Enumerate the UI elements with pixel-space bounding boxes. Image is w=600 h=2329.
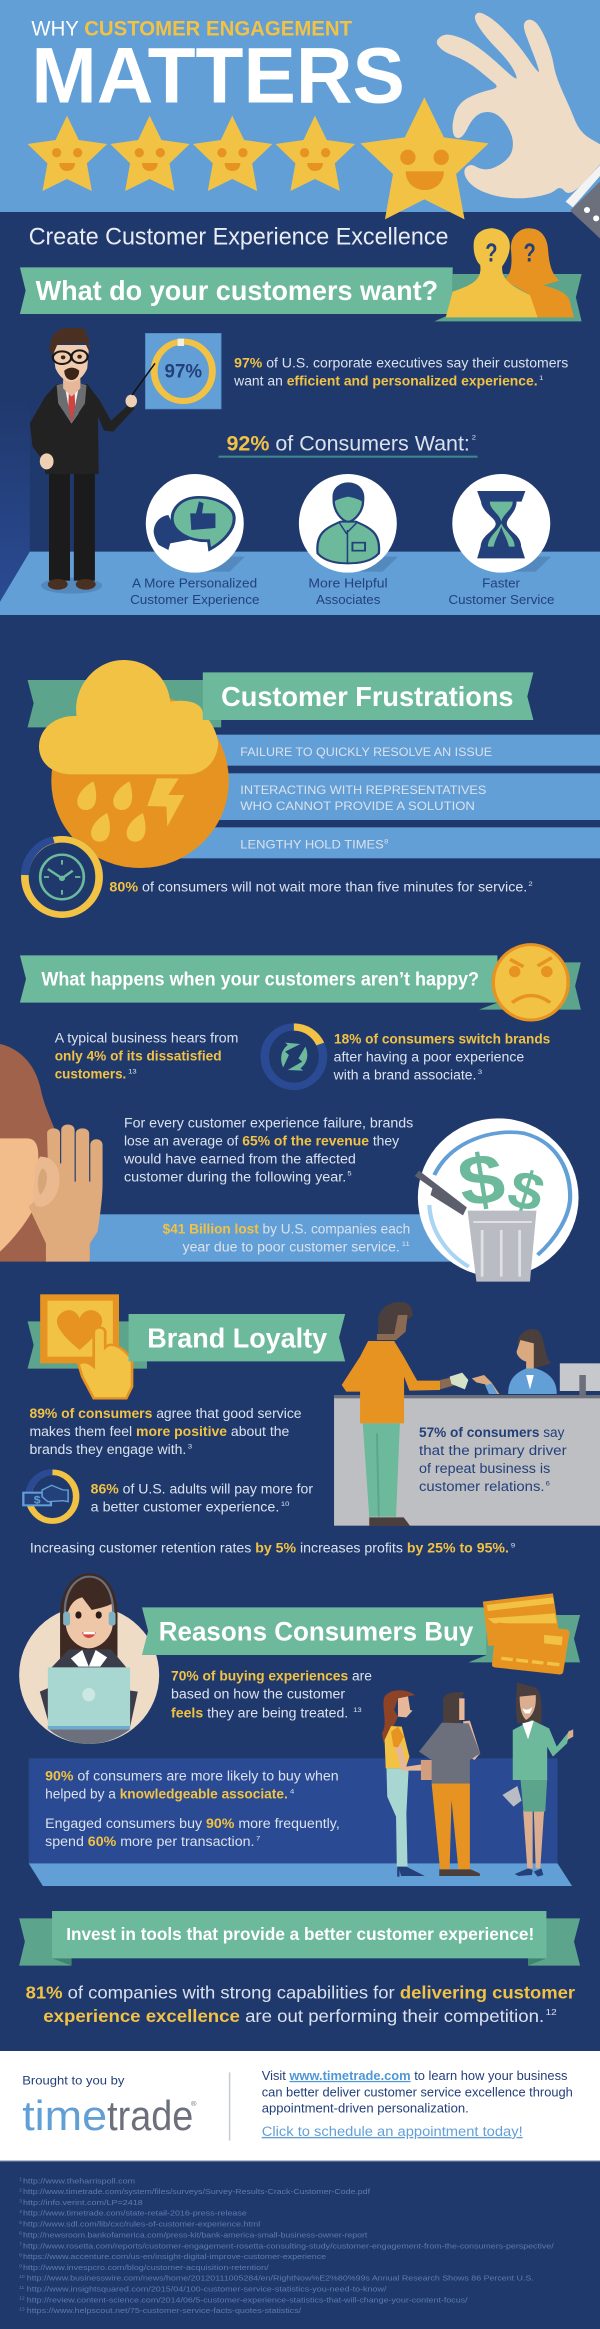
icon: five stars bbox=[28, 97, 489, 219]
bar: $41 billion: 11 bbox=[402, 1240, 410, 1248]
text: 18% switch brands: 3 bbox=[478, 1068, 482, 1076]
heading: 92% of consumers want: 2 bbox=[472, 434, 476, 441]
text: 81% of companies bbox=[26, 1983, 576, 2027]
panel: references bbox=[0, 2160, 600, 2315]
ribbon: customer frustrations heading: Customer Frustrations bbox=[221, 682, 514, 713]
heading: What do your customers want? bbox=[36, 276, 438, 306]
labels: consumer wants: Customer Service bbox=[448, 592, 555, 607]
panel: references: 12 bbox=[19, 2296, 25, 2301]
text: 86% of US adults bbox=[91, 1481, 313, 1515]
text: 57% of consumers: of repeat business is bbox=[419, 1461, 550, 1477]
ribbon back bbox=[28, 1321, 147, 1369]
chart: 86% ring with money bbox=[22, 1472, 76, 1521]
icon: money in trash: $ bbox=[453, 1138, 510, 1222]
labels: consumer wants: A More Personalized bbox=[132, 576, 257, 590]
figure: woman listening bbox=[0, 1044, 103, 1262]
figure: woman customer bbox=[382, 1690, 431, 1877]
ribbon: reasons consumers buy: Reasons Consumers Buy bbox=[159, 1617, 473, 1647]
text: 65% of the revenue: lose an average of 65% of the revenue they bbox=[124, 1133, 400, 1149]
logo: timetrade: time bbox=[22, 2094, 107, 2139]
text: 65% of the revenue: 5 bbox=[347, 1170, 352, 1178]
icon: credit cards bbox=[483, 1593, 570, 1674]
text: retention rates: 9 bbox=[511, 1542, 515, 1549]
text: 81% of companies: 81% of companies with strong capabilities for delivering customer bbox=[26, 1983, 576, 2003]
labels: consumer wants: Customer Experience bbox=[130, 592, 260, 607]
panel: references: 7 bbox=[19, 2242, 22, 2247]
ribbon: brand loyalty heading: Brand Loyalty bbox=[147, 1323, 327, 1354]
panel: footer sponsor bbox=[0, 2051, 600, 2161]
text: 81% of companies: experience excellence are out performing their competition. bbox=[43, 2006, 544, 2027]
text: frustration list: 8 bbox=[384, 838, 388, 845]
panel: references: http://www.invespcro.com/blog/customer-acquisition-retention/ bbox=[23, 2263, 270, 2272]
text: 90% of consumers bbox=[45, 1769, 340, 1850]
panel: references: http://www.timetrade.com/system/files/surveys/Survey-Results-Crack-Customer-Code.pdf bbox=[23, 2187, 371, 2196]
figure: man presenting bbox=[30, 327, 137, 594]
text: 70% of buying experiences: 70% of buying experiences are bbox=[171, 1669, 372, 1684]
panel: customer frustrations bbox=[21, 660, 600, 918]
panel: what customers want bbox=[0, 327, 600, 615]
icon: helpful associate circle bbox=[299, 474, 398, 573]
text: 65% of the revenue: would have earned from the affected bbox=[123, 1151, 356, 1167]
title: why customer engagement: WHY CUSTOMER ENGAGEMENT bbox=[31, 16, 352, 40]
text: 4% of dissatisfied: 13 bbox=[128, 1068, 137, 1075]
labels: consumer wants: Associates bbox=[316, 592, 380, 607]
text: 80% of consumers: 80% of consumers will not wait more than five minutes for service. bbox=[109, 880, 527, 895]
text: 97% executives bbox=[233, 356, 568, 389]
text: visit timetrade: Visit www.timetrade.com to learn how your business bbox=[262, 2069, 568, 2083]
icon: orange silhouette: ? bbox=[523, 238, 536, 267]
text: 18% switch brands: 18% of consumers switch brands bbox=[334, 1031, 550, 1047]
panel: references: 5 bbox=[19, 2220, 22, 2225]
text: 86% of US adults: 86% of U.S. adults will pay more for bbox=[91, 1481, 313, 1497]
ribbon back bbox=[28, 680, 221, 727]
text: frustration list: INTERACTING WITH REPRESENTATIVES bbox=[240, 783, 486, 797]
heading: 92% of consumers want: 92% of Consumers Want: bbox=[227, 431, 470, 455]
text: brought to you by: Brought to you by bbox=[22, 2074, 125, 2087]
text: 4% of dissatisfied: customers. bbox=[55, 1067, 126, 1082]
text: 18% switch brands: with a brand associate. bbox=[333, 1068, 476, 1083]
panel: associates stage bbox=[29, 1758, 572, 1886]
text: 57% of consumers: customer relations. bbox=[419, 1479, 545, 1495]
panel: references: 1 bbox=[19, 2177, 22, 2182]
text: 89% of consumers bbox=[29, 1406, 302, 1458]
text: 65% of the revenue: customer during the following year. bbox=[124, 1169, 346, 1185]
text: frustration list: WHO CANNOT PROVIDE A SOLUTION bbox=[240, 799, 475, 813]
icon: shirt cuff and sleeve bbox=[566, 165, 600, 238]
text: 65% of the revenue: For every customer experience failure, brands bbox=[124, 1115, 413, 1131]
chart: 97% ring: 97% bbox=[165, 361, 202, 382]
ribbon: invest in tools: Invest in tools that provide a better customer experience! bbox=[66, 1924, 534, 1944]
ribbon: invest in tools bbox=[19, 1911, 580, 1966]
panel: references: https://www.accenture.com/us-en/insight-digital-improve-customer-experience bbox=[23, 2252, 326, 2261]
text: 97% executives: want an efficient and personalized experience. bbox=[233, 374, 538, 389]
bar: $41 billion bbox=[90, 1214, 459, 1262]
labels: consumer wants bbox=[130, 576, 555, 607]
bars: frustrations bbox=[168, 735, 600, 858]
panel: references: 8 bbox=[19, 2253, 22, 2257]
icon: hourglass circle bbox=[452, 474, 551, 573]
icon: yellow silhouette: ? bbox=[485, 238, 497, 267]
panel: references: http://www.insightsquared.com/2015/04/100-customer-service-statistics-you-need-to-know/ bbox=[27, 2285, 388, 2294]
figure: customer bbox=[342, 1302, 468, 1526]
labels: consumer wants: Faster bbox=[482, 576, 520, 590]
panel: references: http://info.verint.com/LP=2418 bbox=[23, 2198, 143, 2207]
panel: references: 13 bbox=[19, 2307, 25, 2311]
text: 90% of consumers: Engaged consumers buy 90% more frequently, bbox=[45, 1816, 340, 1832]
icon: yellow silhouette bbox=[446, 228, 538, 317]
text: frustration list: LENGTHY HOLD TIMES bbox=[240, 838, 384, 851]
text: 89% of consumers: brands they engage with. bbox=[29, 1442, 186, 1458]
ribbon: unhappy heading bbox=[20, 955, 581, 1010]
chart: 86% ring with money: $ bbox=[34, 1495, 41, 1506]
bar: $41 billion: $41 Billion lost by U.S. companies each bbox=[163, 1221, 410, 1237]
text: 80% of consumers: 2 bbox=[528, 880, 533, 888]
chart: 97% ring bbox=[145, 333, 221, 409]
text: 90% of consumers: helped by a knowledgeable associate. bbox=[45, 1787, 288, 1802]
panel: header bbox=[0, 0, 600, 321]
text: 90% of consumers: spend 60% more per transaction. bbox=[45, 1834, 254, 1850]
text: 89% of consumers: 3 bbox=[188, 1443, 192, 1451]
text: 4% of dissatisfied: A typical business hears from bbox=[55, 1031, 238, 1046]
title: matters: MATTERS bbox=[31, 32, 405, 120]
panel: references: http://www.rosetta.com/reports/customer-engagement-rosetta-consulting-study/customer-engagement-from-the-consumers-perspective/ bbox=[23, 2242, 555, 2250]
text: 18% switch brands: after having a poor experience bbox=[334, 1050, 524, 1065]
panel: unhappy customers bbox=[0, 945, 581, 1282]
panel: invest in tools bbox=[0, 1911, 600, 2161]
icon: personalized experience circle bbox=[146, 474, 245, 573]
link: schedule an appointment: Click to schedule an appointment today! bbox=[262, 2124, 523, 2140]
logo: timetrade bbox=[22, 2094, 197, 2139]
ribbon: unhappy heading: What happens when your customers aren’t happy? bbox=[41, 969, 479, 990]
logo: timetrade: trade bbox=[107, 2094, 193, 2139]
icon: money in trash bbox=[415, 1118, 579, 1282]
text: 90% of consumers: 7 bbox=[256, 1835, 260, 1843]
figure: clerk behind counter bbox=[472, 1329, 600, 1395]
text: 70% of buying experiences: based on how the customer bbox=[171, 1687, 345, 1702]
chart: 18% ring with arrows bbox=[265, 1027, 323, 1086]
ribbon: customer frustrations heading bbox=[203, 672, 533, 720]
panel: references: https://www.helpscout.net/75-customer-service-facts-quotes-statistics/ bbox=[27, 2306, 302, 2315]
ribbon: what do your customers want bbox=[20, 228, 582, 321]
text: 57% of consumers: 6 bbox=[546, 1480, 550, 1488]
icon: hand bbox=[438, 13, 600, 198]
panel: reasons consumers buy bbox=[19, 1573, 580, 1886]
icon: storm cloud bbox=[39, 660, 229, 868]
panel: references: 2 bbox=[19, 2188, 22, 2192]
subtitle: Create Customer Experience Excellence bbox=[29, 224, 448, 250]
icon: angry face bbox=[493, 945, 568, 1020]
text: 70% of buying experiences bbox=[171, 1669, 372, 1721]
icon: clock ring bbox=[21, 836, 103, 918]
panel: references: http://www.timetrade.com/state-retail-2016-press-release bbox=[23, 2209, 247, 2218]
logo: timetrade: ® bbox=[191, 2100, 197, 2108]
figure: call center agent bbox=[19, 1573, 159, 1744]
stage wall and floor bbox=[0, 400, 600, 615]
text: frustration list bbox=[240, 745, 492, 851]
text: 97% executives: 1 bbox=[539, 374, 543, 382]
labels: consumer wants: More Helpful bbox=[308, 576, 388, 590]
figure: man customer bbox=[419, 1692, 480, 1876]
text: 65% of the revenue bbox=[123, 1115, 413, 1185]
text: 4% of dissatisfied: only 4% of its dissatisfied bbox=[55, 1049, 222, 1064]
panel: brand loyalty bbox=[22, 1294, 600, 1556]
panel: references: http://www.businesswire.com/news/home/20120111005284/en/RightNow%E2%80%99s Annual Research Shows 86 Percent U.S. bbox=[27, 2274, 534, 2283]
text: visit timetrade bbox=[262, 2069, 573, 2115]
panel: references: 9 bbox=[19, 2264, 22, 2268]
icon: money in trash: $ bbox=[501, 1159, 551, 1224]
panel: counter bbox=[334, 1395, 600, 1526]
panel: references: 6 bbox=[19, 2231, 22, 2236]
panel: references: 10 bbox=[19, 2274, 25, 2279]
panel: references: 4 bbox=[19, 2209, 22, 2214]
bar: $41 billion: year due to poor customer service. bbox=[183, 1240, 400, 1255]
text: 90% of consumers: 4 bbox=[290, 1788, 294, 1795]
text: 89% of consumers: makes them feel more positive about the bbox=[29, 1424, 289, 1440]
text: visit timetrade: appointment-driven personalization. bbox=[262, 2102, 469, 2115]
ribbon: reasons consumers buy bbox=[142, 1607, 580, 1662]
text: 90% of consumers: 90% of consumers are more likely to buy when bbox=[45, 1769, 339, 1784]
text: 86% of US adults: 10 bbox=[281, 1500, 289, 1508]
icon: heart and hand bbox=[40, 1294, 132, 1398]
text: 81% of companies: 12 bbox=[546, 2008, 557, 2017]
icon: orange silhouette bbox=[504, 228, 574, 317]
text: 57% of consumers: that the primary driver bbox=[419, 1443, 567, 1459]
text: 57% of consumers: 57% of consumers say bbox=[419, 1425, 565, 1441]
panel: references: http://newsroom.bankofamerica.com/press-kit/bank-america-small-business-owner-report bbox=[23, 2231, 368, 2239]
text: retention rates: Increasing customer retention rates by 5% increases profits by 25% to 95%. bbox=[30, 1541, 509, 1556]
panel: references: 11 bbox=[19, 2285, 25, 2290]
panel: references: http://review.content-science.com/2014/06/5-customer-experience-statistics-that-will-change-your-content-focus/ bbox=[27, 2296, 469, 2304]
text: frustration list: FAILURE TO QUICKLY RESOLVE AN ISSUE bbox=[240, 745, 492, 759]
text: 4% of dissatisfied bbox=[55, 1031, 238, 1082]
text: 86% of US adults: a better customer experience. bbox=[91, 1499, 279, 1515]
text: 57% of consumers bbox=[419, 1425, 567, 1495]
figure: sales associate bbox=[502, 1683, 573, 1877]
panel: references: http://www.theharrispoll.com bbox=[23, 2177, 135, 2185]
ribbon: brand loyalty heading bbox=[129, 1314, 345, 1361]
text: 89% of consumers: 89% of consumers agree that good service bbox=[29, 1406, 302, 1422]
panel: references: 3 bbox=[19, 2199, 22, 2203]
text: 70% of buying experiences: 13 bbox=[353, 1706, 362, 1714]
panel: references: http://www.sdl.com/lib/cxc/rules-of-customer-experience.html bbox=[23, 2220, 261, 2229]
text: 18% switch brands bbox=[333, 1031, 550, 1083]
text: 70% of buying experiences: feels they are being treated. bbox=[171, 1705, 348, 1721]
